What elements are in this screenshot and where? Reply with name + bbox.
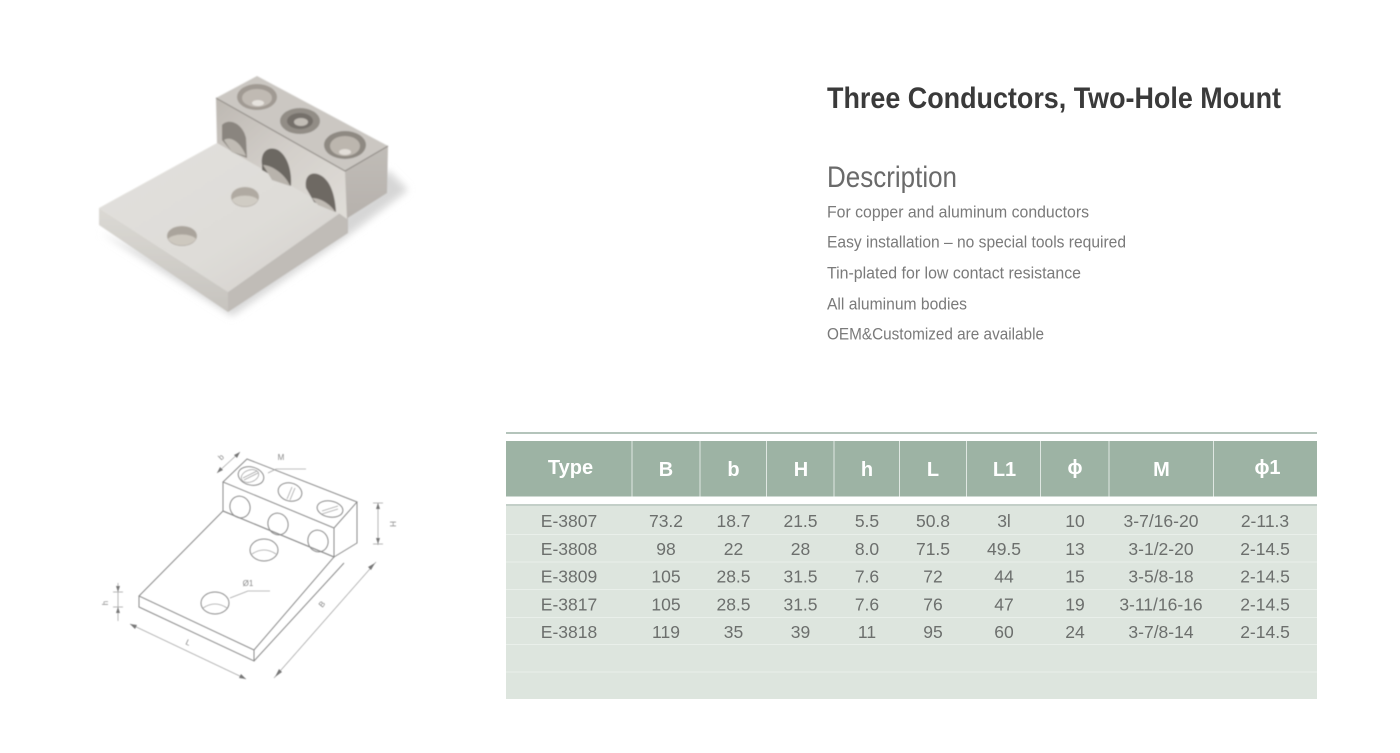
table header: h — [861, 459, 873, 481]
row E-3808: 71.5 — [916, 539, 950, 559]
specification table — [506, 432, 1317, 699]
row E-3807: 5.5 — [855, 511, 879, 531]
plate mounting holes — [167, 187, 259, 246]
table header: H — [794, 459, 808, 481]
description lines: For copper and aluminum conductors — [827, 202, 1089, 222]
row E-3818: 11 — [858, 622, 876, 642]
dimension labels — [101, 452, 397, 648]
dimension labels: M — [278, 453, 285, 462]
row E-3818: 119 — [652, 622, 680, 642]
row E-3809: 3-5/8-18 — [1128, 566, 1194, 586]
row E-3818 — [541, 622, 1290, 642]
dimension labels: L — [184, 638, 192, 648]
row E-3817: 3-11/16-16 — [1119, 594, 1203, 614]
row E-3809: 7.6 — [855, 566, 879, 586]
row E-3808: 13 — [1065, 539, 1085, 559]
plate top — [99, 143, 340, 292]
row E-3818: 3-7/8-14 — [1128, 622, 1194, 642]
row E-3809: 28.5 — [716, 566, 751, 586]
row E-3817: 2-14.5 — [1240, 594, 1290, 614]
row E-3807: 73.2 — [649, 511, 683, 531]
row E-3818: 95 — [923, 622, 943, 642]
table header: L — [927, 459, 939, 481]
row E-3808: 8.0 — [855, 539, 879, 559]
row E-3808: 3-1/2-20 — [1128, 539, 1194, 559]
table header: B — [659, 459, 673, 481]
row E-3807: 18.7 — [716, 511, 751, 531]
block top face — [216, 76, 388, 171]
plate front edge — [99, 208, 228, 312]
row E-3818: 35 — [724, 622, 743, 642]
table header: ϕ — [1068, 457, 1082, 479]
block right face — [344, 146, 388, 219]
table top rule — [506, 432, 1317, 434]
table header — [506, 441, 1317, 496]
table header: b — [727, 459, 740, 481]
dimension arrowheads — [116, 452, 380, 679]
row E-3809: 2-14.5 — [1240, 566, 1290, 586]
row E-3817: 105 — [651, 594, 681, 614]
row E-3818: 2-14.5 — [1240, 622, 1290, 642]
row E-3818: 60 — [994, 622, 1014, 642]
row E-3818: 39 — [791, 622, 810, 642]
description lines: All aluminum bodies — [827, 294, 967, 314]
dimension labels: h — [101, 601, 110, 605]
title: Three Conductors, Two-Hole Mount — [827, 82, 1281, 115]
description lines — [827, 202, 1126, 344]
row E-3807: 2-11.3 — [1241, 511, 1289, 531]
row E-3807: 10 — [1065, 511, 1085, 531]
row E-3808: E-3808 — [541, 539, 597, 559]
plate right edge — [228, 213, 348, 312]
description lines: Tin-plated for low contact resistance — [827, 264, 1081, 282]
table body background — [506, 504, 1317, 699]
row E-3817: 19 — [1065, 594, 1085, 614]
row E-3817: 47 — [994, 594, 1014, 614]
table header: M — [1153, 459, 1170, 481]
dimension labels: b — [216, 452, 226, 462]
dimension labels: B — [317, 599, 327, 609]
row E-3809: 44 — [994, 566, 1014, 586]
drawing outline — [139, 459, 357, 661]
description lines: Easy installation – no special tools required — [827, 232, 1126, 252]
row E-3817 — [541, 594, 1290, 614]
description heading: Description — [827, 161, 957, 194]
dimension labels: H — [388, 521, 397, 527]
photo shadow — [100, 170, 408, 316]
row E-3818: 24 — [1065, 622, 1085, 642]
row E-3809: E-3809 — [541, 566, 597, 586]
row E-3809: 72 — [923, 566, 943, 586]
table header: L1 — [993, 459, 1016, 481]
row E-3808: 22 — [724, 539, 743, 559]
table header: ϕ1 — [1254, 457, 1281, 479]
description lines: OEM&Customized are available — [827, 324, 1044, 344]
drawing holes — [201, 464, 344, 614]
row E-3808: 2-14.5 — [1240, 539, 1290, 559]
row E-3808: 28 — [791, 539, 810, 559]
row E-3808: 98 — [656, 539, 676, 559]
row E-3807: 3l — [997, 511, 1011, 531]
row E-3817: 28.5 — [716, 594, 751, 614]
dimension lines — [113, 452, 383, 679]
row E-3807: 3-7/16-20 — [1124, 511, 1199, 531]
row E-3809: 31.5 — [783, 566, 818, 586]
row E-3808: 49.5 — [987, 539, 1021, 559]
row E-3807 — [541, 511, 1289, 531]
technical drawing — [101, 452, 397, 679]
row E-3809 — [541, 566, 1290, 586]
row E-3809: 15 — [1065, 566, 1085, 586]
row E-3817: 7.6 — [855, 594, 879, 614]
row E-3817: 76 — [923, 594, 943, 614]
table header: Type — [548, 457, 593, 479]
row E-3817: 31.5 — [783, 594, 818, 614]
block front face — [216, 98, 347, 219]
row E-3807: 50.8 — [916, 511, 950, 531]
top screw holes — [237, 84, 366, 159]
dimension labels: Ø1 — [243, 579, 254, 588]
row E-3809: 105 — [651, 566, 681, 586]
description block — [827, 161, 1126, 344]
row E-3807: E-3807 — [541, 511, 597, 531]
row E-3817: E-3817 — [541, 594, 597, 614]
row E-3807: 21.5 — [783, 511, 818, 531]
row E-3818: E-3818 — [541, 622, 597, 642]
front conductor holes — [222, 122, 336, 212]
row E-3808 — [541, 539, 1290, 559]
photo: three-conductor lug — [99, 76, 408, 316]
